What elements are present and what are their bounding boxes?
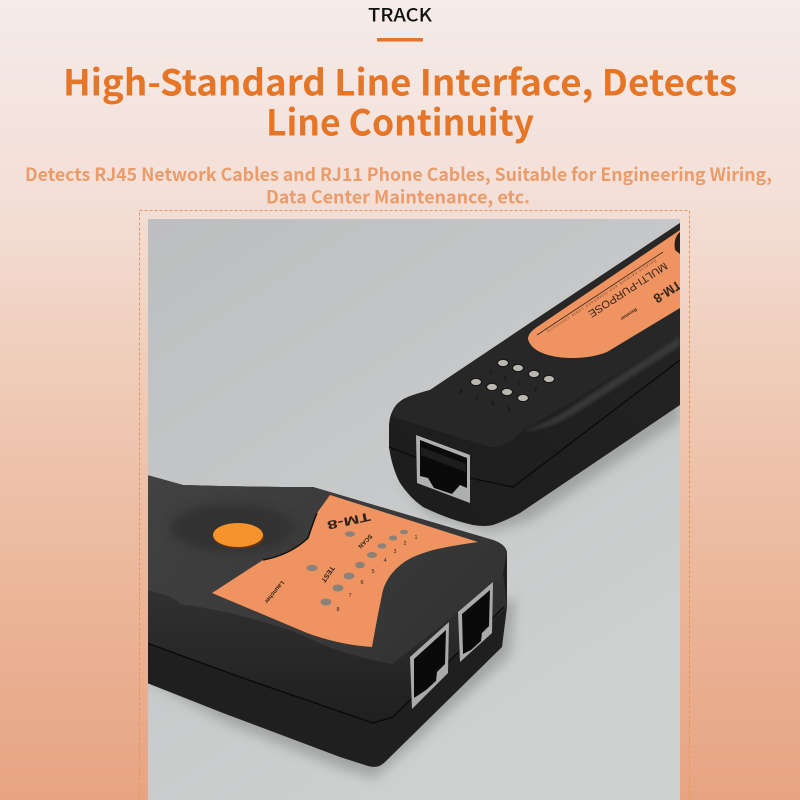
receiver body — [389, 223, 680, 526]
receiver label text: Detects network and telephone cable continuity — [546, 258, 657, 334]
launcher label text: 8 — [336, 607, 340, 613]
receiver top face highlight — [393, 223, 680, 447]
title — [63, 54, 737, 146]
product photo panel — [147, 219, 684, 800]
receiver device — [389, 223, 684, 526]
launcher label text: 4 — [384, 558, 387, 564]
launcher label text: TEST — [319, 565, 335, 584]
receiver label text: TM-8 — [651, 277, 684, 306]
launcher label text — [262, 509, 418, 613]
receiver label text: Receiver — [619, 307, 638, 322]
launcher label text: 2 — [404, 541, 407, 547]
heading label: TRACK: TRACK — [368, 2, 432, 28]
launcher front shoulder — [148, 574, 507, 662]
launcher button — [213, 523, 264, 548]
launcher label text: SCAN — [357, 533, 373, 549]
launcher label text: 3 — [394, 549, 397, 555]
title: High-Standard Line Interface, Detects — [63, 54, 737, 106]
launcher body — [147, 475, 507, 767]
receiver LED numbers: 4 — [534, 385, 538, 391]
launcher device — [147, 475, 507, 767]
subtitle — [25, 161, 772, 210]
launcher label text: 5 — [371, 569, 375, 575]
launcher button recess — [170, 504, 294, 552]
receiver LED numbers: 3 — [517, 379, 521, 385]
receiver label text: MULTI-PURPOSE — [586, 259, 669, 320]
heading accent bar — [377, 38, 423, 42]
launcher label text: 1 — [415, 535, 418, 541]
receiver LEDs — [470, 359, 554, 402]
receiver LED numbers: 7 — [475, 393, 479, 399]
launcher left port — [410, 622, 449, 709]
receiver orange label — [528, 230, 680, 358]
launcher seam — [147, 607, 504, 723]
launcher label text: 6 — [360, 580, 364, 586]
launcher orange label — [212, 495, 478, 647]
receiver LED numbers: 6 — [491, 399, 495, 405]
receiver seam — [389, 360, 680, 487]
launcher right port — [458, 582, 493, 662]
receiver LED numbers: 5 — [507, 404, 511, 410]
receiver label line — [537, 252, 663, 335]
launcher label text: 7 — [348, 593, 352, 599]
receiver side groove — [523, 336, 680, 431]
receiver LED numbers: 2 — [503, 374, 507, 380]
launcher label text: Launcher — [262, 579, 285, 604]
launcher label edge shadow — [263, 513, 317, 560]
receiver RJ45 port — [416, 435, 470, 503]
launcher label text: TM-8 — [325, 509, 372, 532]
launcher LEDs — [306, 530, 408, 606]
receiver logo mark — [675, 232, 680, 254]
receiver LED numbers: 8 — [459, 387, 463, 393]
subtitle: Detects RJ45 Network Cables and RJ11 Phone Cables, Suitable for Engineering Wiring, — [25, 161, 772, 187]
subtitle: Data Center Maintenance, etc. — [266, 184, 530, 210]
dashed photo frame — [140, 210, 690, 800]
receiver LED numbers — [459, 368, 538, 410]
device shadows — [148, 395, 680, 778]
launcher top face — [147, 475, 507, 664]
title: Line Continuity — [266, 94, 534, 146]
receiver LED numbers: 1 — [489, 368, 493, 374]
